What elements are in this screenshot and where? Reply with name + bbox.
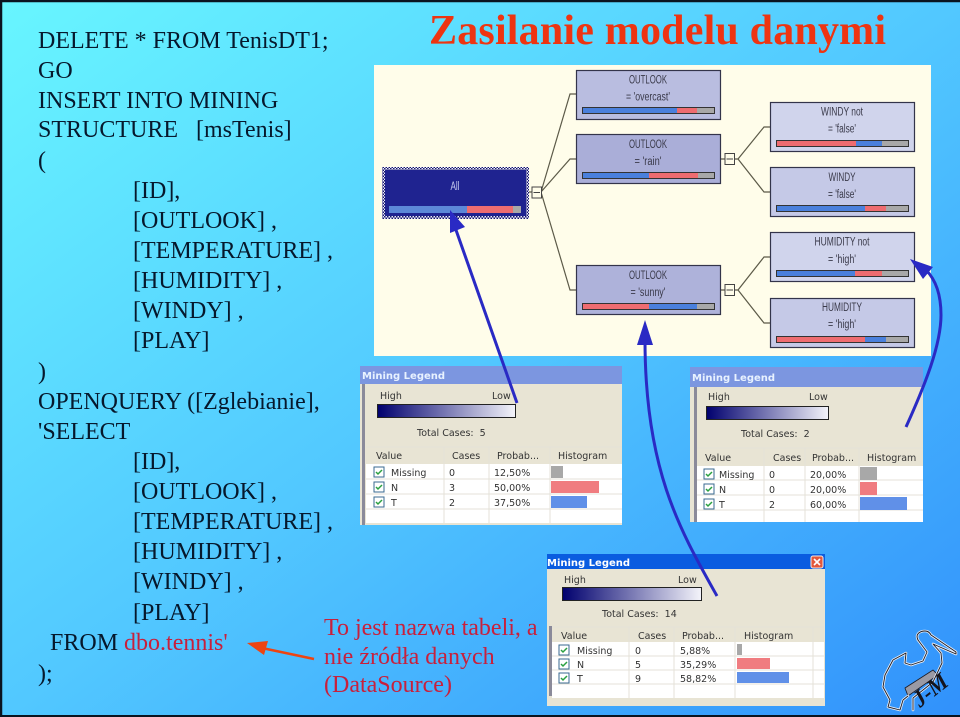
icon: close button [811,556,823,568]
node: humidity high [770,298,914,348]
panel: mining legend 14 cases [547,554,825,706]
panel: mining legend 2 cases: 0 [769,485,775,496]
node: sunny [576,266,720,314]
panel: mining legend 14 cases: Total Cases: 14 [601,609,677,620]
SQL code block: [PLAY] [133,328,209,354]
panel: mining legend 14 cases: 58,82% [680,674,716,685]
SQL code block: [HUMIDITY] , [133,539,282,565]
callout: table name note: nie źródła danych [324,644,495,670]
SQL code block: ); [38,661,53,687]
panel: mining legend 14 cases: 0 [635,646,641,657]
SQL code block: [OUTLOOK] , [133,208,277,234]
panel: decision tree [374,65,931,356]
panel: mining legend 2 cases: Histogram [867,453,916,464]
panel: mining legend 5 cases: Cases [452,451,480,462]
panel: mining legend 5 cases: 3 [449,483,455,494]
SQL code block: OPENQUERY ([Zglebianie], [38,389,320,415]
SQL code block: INSERT INTO MINING [38,88,278,114]
node: sunny: OUTLOOK [629,270,667,282]
panel: mining legend 2 cases: N [719,485,726,496]
arrow: callout to dbo.tennis [247,641,314,659]
panel: mining legend 5 cases: 37,50% [494,498,530,509]
SQL code block: [TEMPERATURE] , [133,509,333,535]
panel: mining legend 14 cases: Histogram [744,631,793,642]
panel: mining legend 2 cases: Low [809,392,828,403]
callout: table name note: (DataSource) [324,672,452,698]
panel: mining legend 5 cases: 2 [449,498,455,509]
SQL code block: [WINDY] , [133,298,244,324]
panel: mining legend 2 cases: Mining Legend [692,373,775,384]
node: rain: OUTLOOK [629,139,667,151]
node: humidity high: HUMIDITY [822,302,862,314]
panel: mining legend 14 cases: 35,29% [680,660,716,671]
panel: mining legend 14 cases: Missing [577,646,612,657]
callout: table name note [324,615,538,698]
SQL code block: 'SELECT [38,419,131,445]
panel: mining legend 14 cases: Low [678,575,697,586]
SQL code block [38,28,333,687]
node: All: All [450,181,460,193]
SQL code block: GO [38,58,73,84]
node: overcast: = 'overcast' [626,92,670,104]
SQL code block: [PLAY] [133,600,209,626]
panel: mining legend 5 cases: High [380,391,402,402]
callout: table name note: To jest nazwa tabeli, a [324,615,538,641]
node: overcast: OUTLOOK [629,74,667,86]
panel: mining legend 5 cases [360,366,622,525]
node: rain: = 'rain' [634,156,662,168]
panel: mining legend 5 cases: Mining Legend [362,371,445,382]
SQL code block: STRUCTURE [msTenis] [38,117,292,143]
SQL code block: [WINDY] , [133,569,244,595]
panel: mining legend 5 cases: Missing [391,468,426,479]
node: windy not false: WINDY not [821,106,864,118]
panel: mining legend 2 cases: Value [705,453,731,464]
panel: mining legend 14 cases: Value [561,631,587,642]
panel: mining legend 2 cases: High [708,392,730,403]
panel: mining legend 14 cases: 9 [635,674,641,685]
panel: mining legend 2 cases: Cases [773,453,801,464]
SQL code block: [ID], [133,449,180,475]
node: All [382,167,529,219]
panel: mining legend 5 cases: 12,50% [494,468,530,479]
icon: pelican logo [883,631,956,713]
node: rain [576,134,720,184]
node: humidity not high: = 'high' [828,254,856,266]
panel: mining legend 14 cases: High [564,575,586,586]
SQL code block: ( [38,148,46,174]
SQL code block: [TEMPERATURE] , [133,238,333,264]
node: humidity not high [770,232,914,282]
SQL code block: [OUTLOOK] , [133,479,277,505]
SQL code block: [HUMIDITY] , [133,268,282,294]
arrow: legend 2 cases to humidity node [906,259,941,427]
SQL code block: DELETE * FROM TenisDT1; [38,28,329,54]
node: overcast [576,70,720,120]
node: windy false: WINDY [828,172,856,184]
panel: mining legend 2 cases: 20,00% [810,485,846,496]
title: Zasilanie modelu danymi [429,8,886,54]
panel: mining legend 5 cases: Probab... [497,451,539,462]
panel: mining legend 14 cases: N [577,660,584,671]
SQL code block: [ID], [133,178,180,204]
panel: mining legend 2 cases: 0 [769,470,775,481]
SQL code block: ) [38,359,46,385]
SQL code block: FROM dbo.tennis' [50,630,228,656]
panel: mining legend 5 cases: Value [376,451,402,462]
panel: mining legend 5 cases: 50,00% [494,483,530,494]
arrow: legend 5 cases to All node [450,210,517,403]
panel: mining legend 5 cases: Total Cases: 5 [416,428,486,439]
node: sunny: = 'sunny' [630,287,666,299]
node: windy false [770,168,914,216]
panel: mining legend 14 cases: T [576,674,583,685]
panel: mining legend 2 cases: 60,00% [810,500,846,511]
node: humidity not high: HUMIDITY not [814,236,870,248]
panel: mining legend 5 cases: 0 [449,468,455,479]
panel: mining legend 14 cases: Cases [638,631,666,642]
panel: mining legend 2 cases: 20,00% [810,470,846,481]
node: humidity high: = 'high' [828,319,856,331]
icon: pelican logo: J-M [907,668,955,713]
panel: mining legend 5 cases: Histogram [558,451,607,462]
panel: mining legend 5 cases: N [391,483,398,494]
panel: mining legend 5 cases: Low [492,391,511,402]
arrow: legend 14 cases to sunny node [637,320,717,596]
node: windy not false [770,102,914,152]
panel: mining legend 14 cases: Probab... [682,631,724,642]
node: windy not false: = 'false' [828,124,856,136]
panel: mining legend 2 cases: Probab... [812,453,854,464]
node: windy false: = 'false' [828,189,856,201]
panel: mining legend 2 cases [690,367,923,522]
panel: mining legend 14 cases: Mining Legend [547,558,630,569]
panel: mining legend 14 cases: 5,88% [680,646,710,657]
panel: mining legend 2 cases: Total Cases: 2 [740,429,810,440]
panel: mining legend 2 cases: Missing [719,470,754,481]
panel: mining legend 2 cases: 2 [769,500,775,511]
panel: mining legend 5 cases: T [390,498,397,509]
panel: mining legend 2 cases: T [718,500,725,511]
panel: mining legend 14 cases: 5 [635,660,641,671]
